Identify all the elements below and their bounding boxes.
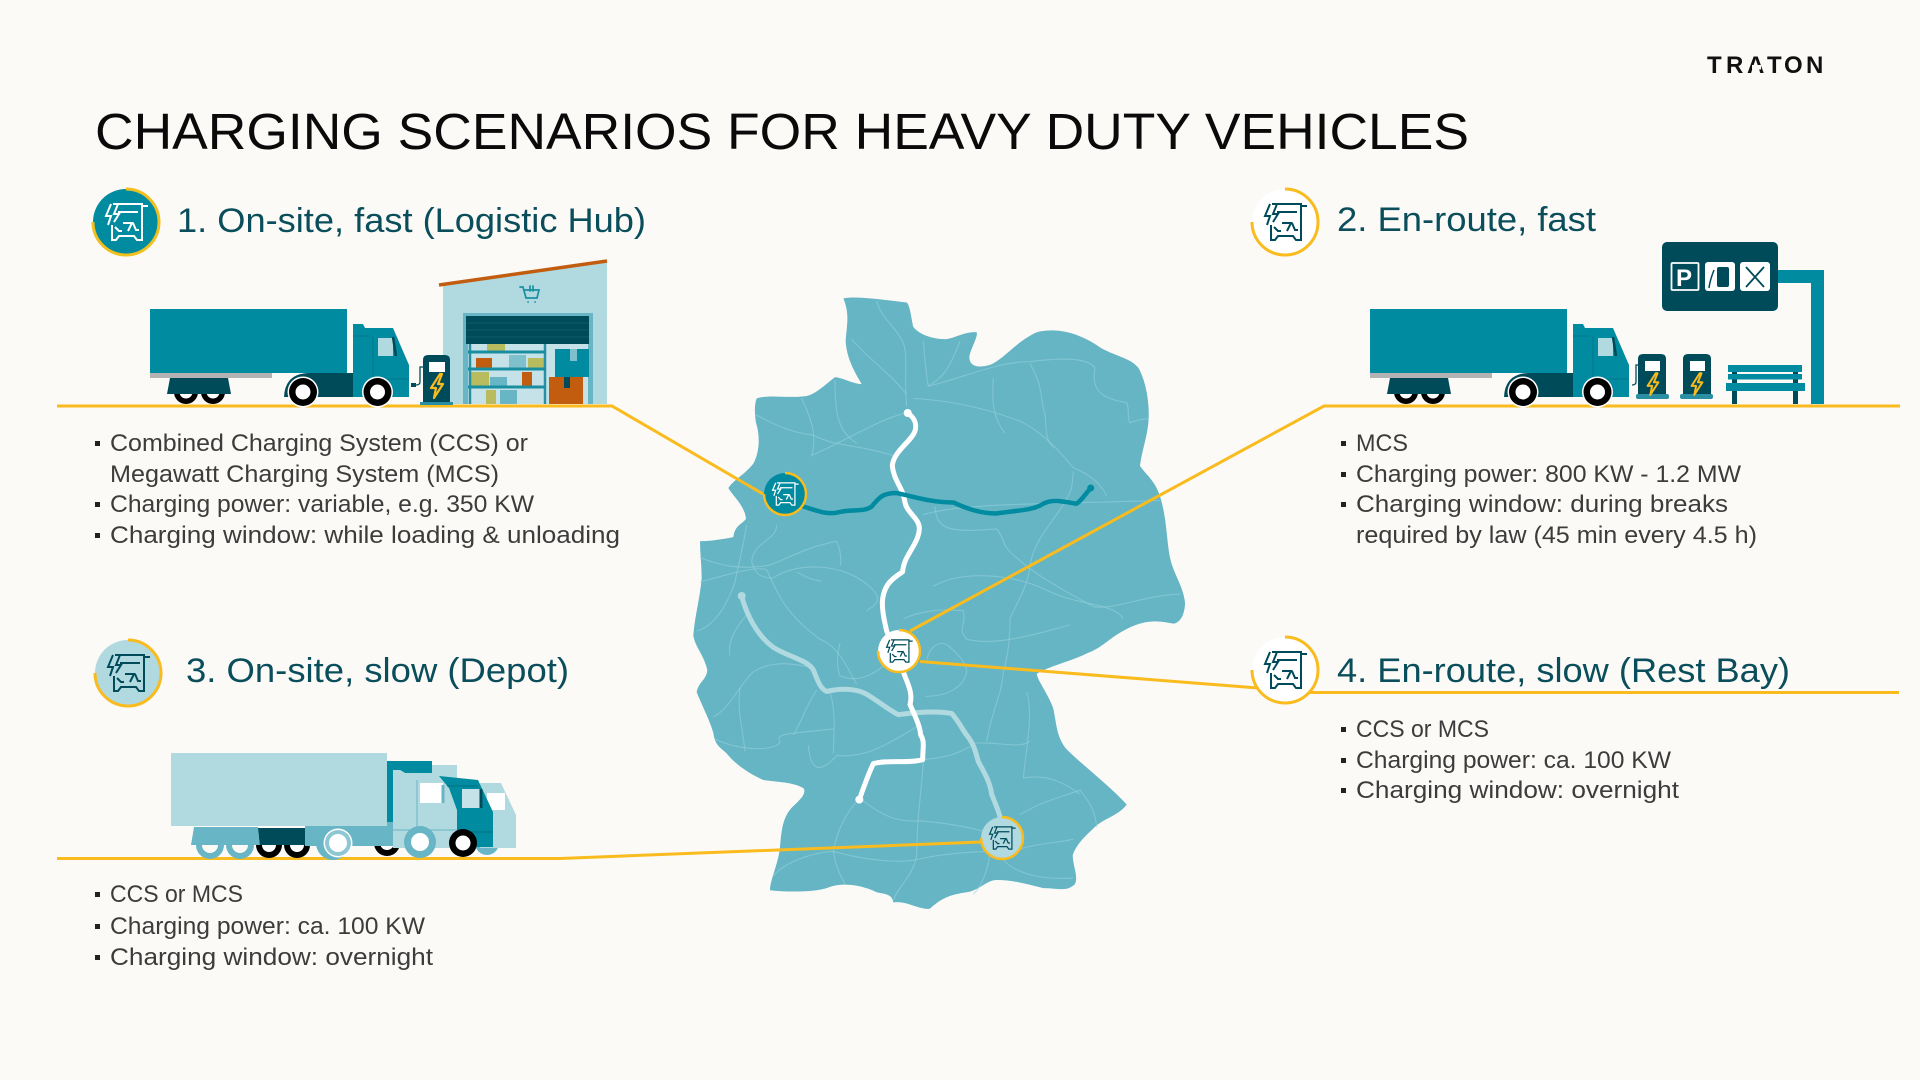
bullet list 4: Charging power: ca. 100 KW — [1356, 747, 1671, 774]
bullet list 2: Charging window: during breaks — [1356, 491, 1728, 518]
map marker 3: depot — [981, 817, 1023, 859]
heading 2: 2. En-route, fast — [1337, 201, 1597, 239]
bench — [1726, 365, 1805, 404]
bullet list 2: required by law (45 min every 4.5 h) — [1356, 522, 1757, 549]
bullet list 4 — [1341, 716, 1679, 804]
route: light blue — [742, 596, 1000, 817]
trucks at depot — [171, 753, 516, 860]
connector lines — [57, 406, 1900, 858]
truck with trailer — [1370, 309, 1629, 408]
service sign: P — [1676, 265, 1692, 292]
map marker 1: logistic hub — [764, 473, 806, 515]
route: teal — [803, 488, 1091, 513]
bullet list 1: Charging window: while loading & unloading — [110, 522, 620, 549]
truck with trailer — [150, 309, 409, 408]
bullet list 4: Charging window: overnight — [1356, 777, 1679, 804]
bullet list 1: Megawatt Charging System (MCS) — [110, 461, 499, 488]
charger — [411, 355, 453, 405]
bullet list 2: Charging power: 800 KW - 1.2 MW — [1356, 461, 1741, 488]
sign post — [1778, 270, 1824, 404]
warehouse — [439, 261, 607, 404]
bullet list 3: Charging power: ca. 100 KW — [110, 913, 425, 940]
route: white — [859, 413, 923, 800]
bullet list 2: MCS — [1356, 430, 1408, 457]
bullet list 2 — [1341, 430, 1757, 549]
charger B — [1680, 354, 1713, 399]
bullet list 3: CCS or MCS — [110, 881, 243, 908]
heading 4: 4. En-route, slow (Rest Bay) — [1337, 652, 1790, 690]
bullet list 3 — [95, 881, 433, 971]
route end dots — [738, 409, 1094, 804]
icon: charging truck, teal — [93, 189, 159, 255]
heading 1: 1. On-site, fast (Logistic Hub) — [177, 202, 646, 240]
map of Germany with routes — [693, 297, 1185, 909]
service sign — [1662, 242, 1778, 311]
panel 2: en-route fast — [1252, 189, 1824, 549]
panel 3: on-site slow — [95, 640, 569, 971]
bullet list 1: Charging power: variable, e.g. 350 KW — [110, 491, 534, 518]
icon: charging truck, light — [95, 640, 161, 706]
thin road network — [697, 300, 1180, 900]
icon: charging truck, white — [1252, 637, 1318, 703]
bullet list 4: CCS or MCS — [1356, 716, 1489, 743]
map outline — [693, 297, 1185, 909]
panel 1: on-site fast — [93, 189, 646, 549]
heading 3: 3. On-site, slow (Depot) — [186, 652, 569, 690]
title: CHARGING SCENARIOS FOR HEAVY DUTY VEHICLES — [95, 103, 1469, 160]
icon: charging truck, white — [1252, 189, 1318, 255]
panel 4: en-route slow — [1252, 637, 1790, 804]
map marker 2: en-route — [878, 630, 920, 672]
logo: TRATON: TRATON — [1707, 52, 1823, 79]
bullet list 1: Combined Charging System (CCS) or — [110, 430, 528, 457]
bullet list 1 — [95, 430, 620, 549]
bullet list 3: Charging window: overnight — [110, 944, 433, 971]
charger A — [1632, 354, 1669, 399]
